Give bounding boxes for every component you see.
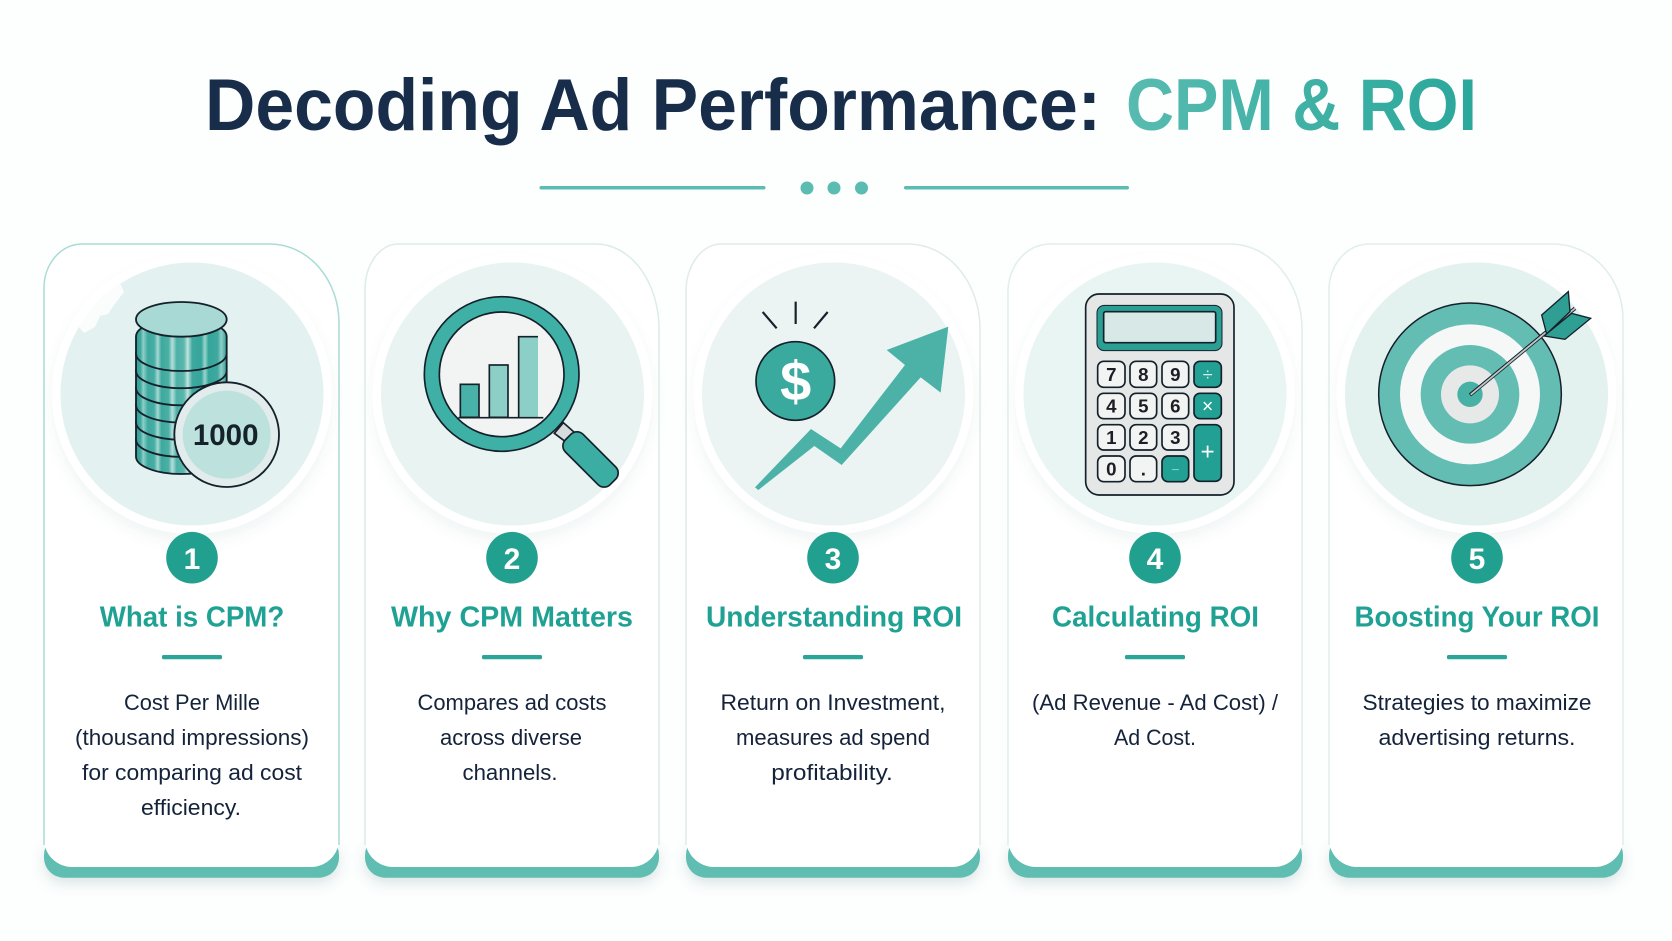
panel: What is CPM? bbox=[44, 244, 339, 878]
step number 5: 5 bbox=[1469, 543, 1485, 576]
heading underline bbox=[1125, 655, 1185, 659]
description: for comparing ad cost bbox=[82, 760, 303, 785]
description bbox=[1362, 690, 1592, 750]
description bbox=[720, 690, 946, 785]
step number 3 bbox=[807, 532, 859, 584]
icon: magnifying glass with bar chart bbox=[424, 297, 622, 491]
description: Return on Investment, bbox=[720, 690, 946, 715]
icon: calculator: 8 bbox=[1138, 364, 1149, 385]
icon: calculator: 7 bbox=[1106, 364, 1117, 385]
icon: calculator: 9 bbox=[1170, 364, 1181, 385]
description: channels. bbox=[462, 760, 558, 785]
icon: calculator: ÷ bbox=[1203, 365, 1213, 385]
heading: What is CPM? bbox=[100, 602, 284, 634]
panel: Why CPM Matters bbox=[365, 244, 659, 878]
description: measures ad spend bbox=[736, 725, 930, 750]
description: across diverse bbox=[440, 725, 582, 750]
icon: dollar coin and rising arrow bbox=[755, 302, 948, 490]
step number 5 bbox=[1451, 532, 1503, 584]
panel: Understanding ROI bbox=[686, 244, 980, 878]
title divider with three dots bbox=[540, 182, 1129, 194]
description bbox=[418, 690, 606, 785]
step number 1: 1 bbox=[184, 543, 200, 576]
icon: coin stack with 1000 coin bbox=[136, 302, 279, 487]
icon: calculator: 1 bbox=[1106, 427, 1117, 448]
icon: calculator: 2 bbox=[1138, 427, 1149, 448]
step number 2 bbox=[486, 532, 538, 584]
icon: calculator: + bbox=[1201, 439, 1215, 466]
heading: Calculating ROI bbox=[1052, 602, 1259, 634]
icon: calculator: 3 bbox=[1170, 427, 1181, 448]
heading underline bbox=[803, 655, 863, 659]
panel: Boosting Your ROI bbox=[1329, 244, 1623, 878]
icon: coin stack with 1000 coin: 1000 bbox=[193, 419, 258, 452]
title: Decoding Ad Performance: bbox=[205, 65, 1101, 146]
description: Strategies to maximize bbox=[1362, 690, 1592, 715]
step number 1 bbox=[166, 532, 218, 584]
description: Ad Cost. bbox=[1114, 725, 1196, 750]
step number 4: 4 bbox=[1147, 543, 1164, 576]
description: Compares ad costs bbox=[418, 690, 606, 715]
heading: Understanding ROI bbox=[706, 602, 962, 634]
step number 3: 3 bbox=[825, 543, 841, 576]
heading underline bbox=[162, 655, 222, 659]
icon: calculator bbox=[1086, 294, 1234, 495]
description bbox=[75, 690, 309, 820]
icon: calculator: 5 bbox=[1138, 396, 1149, 417]
description: efficiency. bbox=[141, 795, 241, 820]
icon: calculator: . bbox=[1141, 458, 1146, 479]
heading: Why CPM Matters bbox=[391, 602, 633, 634]
description: advertising returns. bbox=[1378, 725, 1576, 750]
description: (Ad Revenue - Ad Cost) / bbox=[1032, 690, 1279, 715]
step number 4 bbox=[1129, 532, 1181, 584]
description bbox=[1032, 690, 1279, 750]
description: (thousand impressions) bbox=[75, 725, 309, 750]
icon: calculator: × bbox=[1202, 396, 1213, 417]
heading underline bbox=[482, 655, 542, 659]
description: profitability. bbox=[771, 760, 893, 785]
step number 2: 2 bbox=[504, 543, 520, 576]
icon: calculator: − bbox=[1171, 462, 1180, 478]
icon: calculator: 0 bbox=[1106, 458, 1117, 479]
title: CPM & ROI bbox=[1126, 65, 1477, 146]
icon: target with arrow bbox=[1379, 292, 1591, 486]
heading: Boosting Your ROI bbox=[1354, 602, 1600, 634]
panel: Calculating ROI bbox=[1008, 244, 1302, 878]
description: Cost Per Mille bbox=[124, 690, 260, 715]
icon: calculator: 6 bbox=[1170, 396, 1181, 417]
icon: calculator: 4 bbox=[1106, 396, 1117, 417]
icon: dollar coin and rising arrow: $ bbox=[780, 349, 811, 412]
heading underline bbox=[1447, 655, 1507, 659]
